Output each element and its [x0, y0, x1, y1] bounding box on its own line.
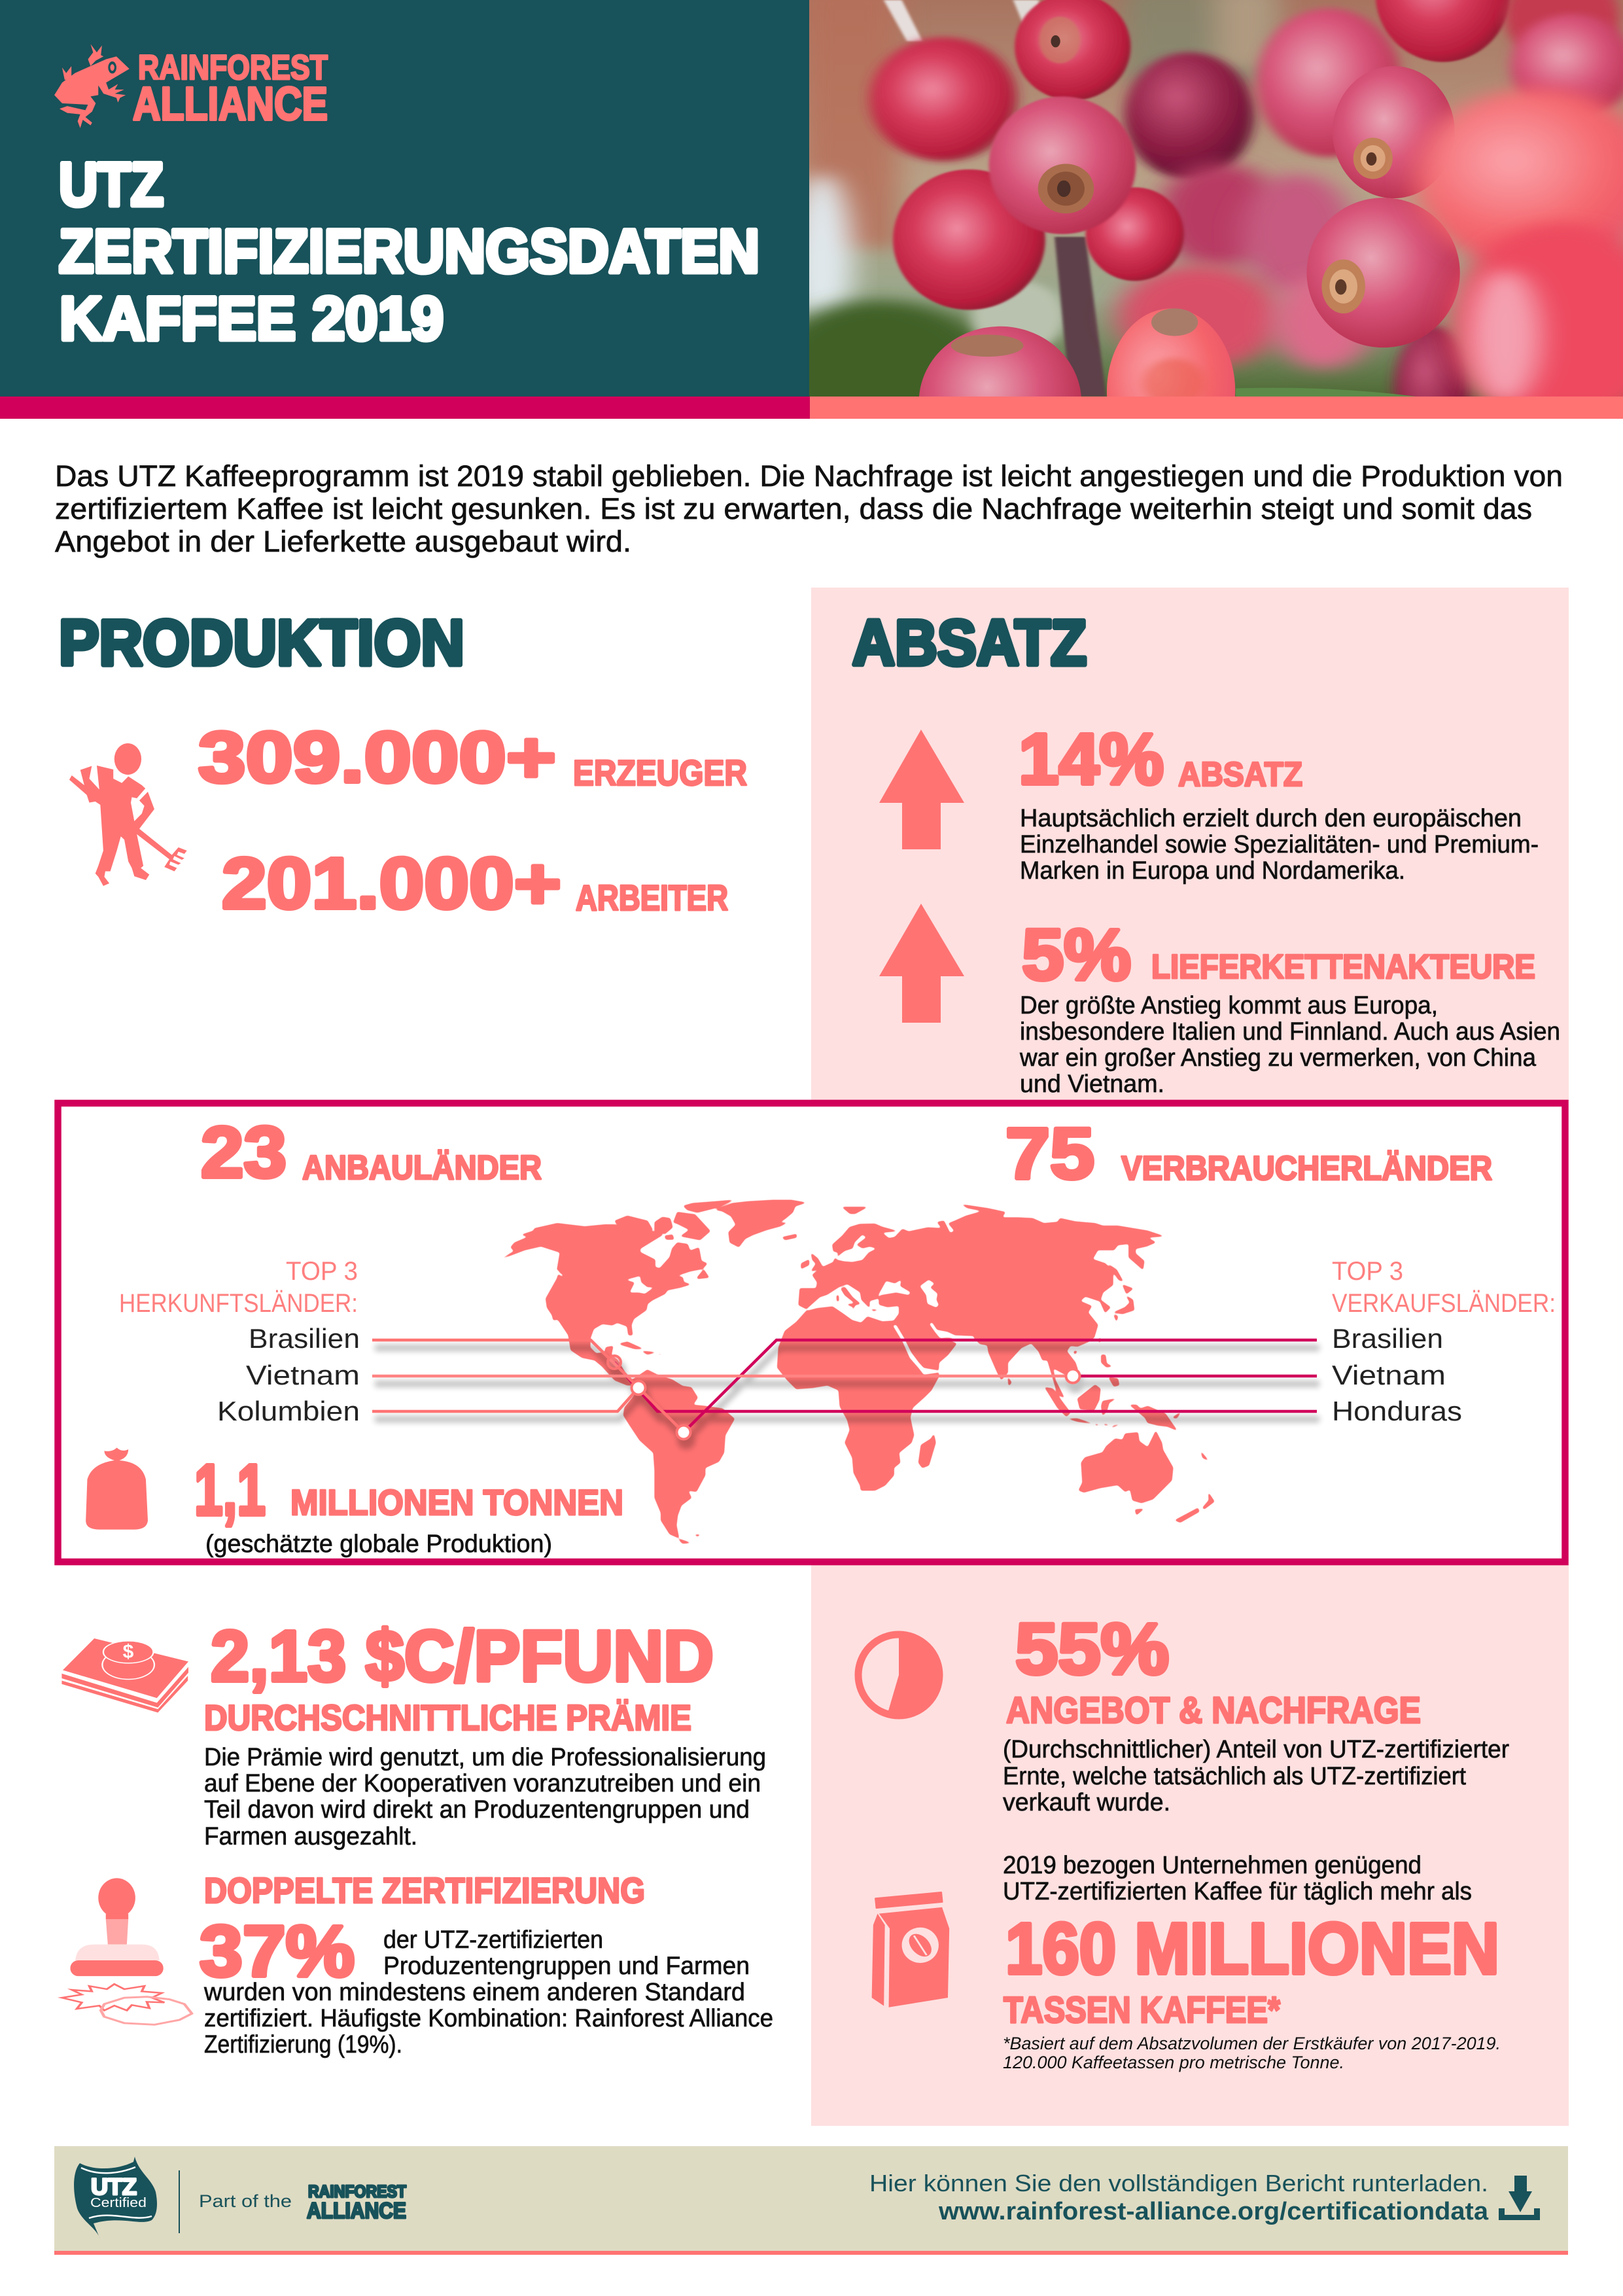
stat: 55%: 55% [1015, 1609, 1169, 1689]
icon: money stack with coin: $ [123, 1641, 134, 1663]
text: Lieferkette description: Der größte Anstieg kommt aus Europa, [1020, 992, 1438, 1019]
icon: money stack with coin [61, 1638, 188, 1712]
list: top 3 sales countries: VERKAUFSLÄNDER: [1332, 1289, 1556, 1318]
icon: stamp [61, 1878, 192, 2024]
stat: Arbeiter [222, 843, 728, 924]
logo wordmark: ALLIANCE [133, 79, 328, 130]
icon: up arrow 5% [879, 904, 964, 1023]
header accent bars [0, 397, 1623, 419]
stat: 14% Absatz [1019, 719, 1302, 800]
text: supply description [1003, 1736, 1509, 1816]
icon: farmer with rake [69, 743, 187, 886]
icon: up arrow 14% [879, 730, 964, 849]
stat: Erzeuger [198, 717, 747, 798]
text: purchases lead-in [1003, 1852, 1472, 1905]
stat: 37%: 37% [200, 1911, 355, 1992]
panel: Produktion [59, 607, 747, 924]
text: purchases lead-in: UTZ-zertifizierten Kaffee für täglich mehr als [1003, 1878, 1472, 1905]
heading: supply and demand: ANGEBOT & NACHFRAGE [1006, 1689, 1421, 1731]
stat: 5% Lieferkettenakteure: LIEFERKETTENAKTEURE [1151, 948, 1535, 986]
list: top 3 origin countries: Brasilien [249, 1323, 360, 1354]
text: download link: Hier können Sie den vollständigen Bericht runterladen. [869, 2170, 1488, 2197]
stat: 1,1 Millionen Tonnen: (geschätzte globale Produktion) [205, 1530, 552, 1558]
list: top 3 sales countries: Honduras [1332, 1396, 1462, 1426]
text: part of the Rainforest Alliance: ALLIANCE [307, 2199, 406, 2223]
text: certification description: Produzentengruppen und Farmen [383, 1952, 750, 1980]
stat: 1,1 Millionen Tonnen: 1,1 [194, 1450, 266, 1530]
text: certification description: wurden von mindestens einem anderen Standard [203, 1979, 745, 2006]
list: top 3 sales countries [1332, 1257, 1556, 1426]
stat: 75 Verbraucherländer: 75 [1005, 1114, 1094, 1194]
text: Lieferkette description: insbesondere Italien und Finnland. Auch aus Asien [1020, 1018, 1560, 1046]
logo wordmark: RAINFOREST [138, 48, 328, 87]
heading: Tassen Kaffee: TASSEN KAFFEE* [1003, 1989, 1281, 2031]
text: part of the Rainforest Alliance: RAINFOREST [308, 2181, 406, 2201]
stat: Erzeuger: 309.000+ [198, 717, 556, 798]
intro text: Angebot in der Lieferkette ausgebaut wird. [55, 525, 631, 558]
text: Absatz description: Einzelhandel sowie Spezialitäten- und Premium- [1020, 831, 1539, 858]
title: KAFFEE 2019 [60, 284, 444, 353]
list: top 3 origin countries: TOP 3 [286, 1257, 358, 1286]
list: top 3 origin countries: HERKUNFTSLÄNDER: [119, 1289, 358, 1318]
text: certification description: zertifiziert. Häufigste Kombination: Rainforest Alliance [204, 2005, 773, 2032]
section: price premium [61, 1616, 766, 1850]
logo wordmark [133, 48, 328, 130]
section: cups of coffee [872, 1852, 1501, 2072]
text: Absatz description: Hauptsächlich erzielt durch den europäischen [1020, 805, 1522, 832]
stat: Erzeuger: ERZEUGER [573, 752, 747, 793]
icon: UTZ Certified badge: Certified [90, 2196, 147, 2210]
stat: price: 2,13 $C/PFUND [211, 1616, 714, 1697]
icon: UTZ Certified badge [74, 2157, 157, 2239]
icon: sack [86, 1448, 148, 1530]
stat: 23 Anbauländer: 23 [201, 1112, 287, 1193]
heading: average premium: DURCHSCHNITTLICHE PRÄMIE [204, 1697, 691, 1738]
footnote: *Basiert auf dem Absatzvolumen der Erstkäufer von 2017-2019. [1003, 2034, 1501, 2053]
text: certification description: Zertifizierung (19%). [204, 2031, 402, 2058]
stat: 23 Anbauländer [201, 1112, 542, 1193]
text: download link [869, 2170, 1489, 2225]
list: top 3 origin countries: Vietnam [246, 1360, 360, 1390]
text: purchases lead-in: 2019 bezogen Unternehmen genügend [1003, 1852, 1422, 1879]
icon: pie chart 55% [858, 1634, 939, 1716]
text: supply description: verkauft wurde. [1003, 1789, 1170, 1816]
text: premium description: Teil davon wird direkt an Produzentengruppen und [204, 1796, 750, 1824]
text: premium description: auf Ebene der Kooperativen voranzutreiben und ein [204, 1770, 761, 1797]
text: supply description: (Durchschnittlicher) Anteil von UTZ-zertifizierter [1003, 1736, 1509, 1763]
stat: Arbeiter: ARBEITER [576, 877, 728, 918]
stat: 1,1 Millionen Tonnen: MILLIONEN TONNEN [290, 1482, 623, 1523]
footnote [1003, 2034, 1501, 2072]
stat: Arbeiter: 201.000+ [222, 843, 561, 924]
list: top 3 sales countries: Brasilien [1332, 1323, 1443, 1354]
connector lines [372, 1340, 1319, 1446]
text: premium description [204, 1744, 766, 1850]
text: download link: www.rainforest-alliance.org/certificationdata [938, 2198, 1489, 2225]
stat: 160 Millionen: 160 MILLIONEN [1005, 1909, 1499, 1989]
stat: 75 Verbraucherländer [1005, 1114, 1492, 1194]
stat: 1,1 Millionen Tonnen [194, 1450, 623, 1558]
intro text [55, 459, 1563, 558]
text: supply description: Ernte, welche tatsächlich als UTZ-zertifiziert [1003, 1763, 1466, 1790]
stat: 14% Absatz: ABSATZ [1178, 756, 1302, 794]
panel: lower pink background [811, 1565, 1569, 2126]
text: certification description: der UTZ-zertifizierten [383, 1926, 603, 1954]
stat: 5% Lieferkettenakteure: 5% [1022, 915, 1131, 995]
world map [471, 1191, 1256, 1557]
photo: red coffee cherries [809, 0, 1623, 397]
text: Absatz description [1020, 805, 1539, 885]
text: Absatz description: Marken in Europa und Nordamerika. [1020, 857, 1405, 885]
heading: Produktion: PRODUKTION [59, 607, 464, 679]
section: double certification [61, 1870, 773, 2058]
list: top 3 sales countries: TOP 3 [1332, 1257, 1403, 1286]
stat: 75 Verbraucherländer: VERBRAUCHERLÄNDER [1121, 1150, 1492, 1188]
icon: coffee bag [872, 1892, 949, 2007]
intro text: zertifiziertem Kaffee ist leicht gesunken. Es ist zu erwarten, dass die Nachfrage weiterhin steigt und somit das [55, 492, 1532, 525]
footnote: 120.000 Kaffeetassen pro metrische Tonne. [1003, 2053, 1344, 2072]
stat: 23 Anbauländer: ANBAULÄNDER [302, 1149, 542, 1187]
stat: 14% Absatz: 14% [1019, 719, 1164, 800]
title [59, 150, 759, 353]
markers [608, 1356, 1079, 1439]
heading: double certification: DOPPELTE ZERTIFIZIERUNG [204, 1870, 645, 1911]
section: supply and demand [858, 1609, 1509, 1816]
panel: Absatz [811, 588, 1569, 1101]
text: Lieferkette description [1019, 992, 1560, 1098]
footer [54, 2146, 1568, 2255]
text: premium description: Farmen ausgezahlt. [204, 1823, 417, 1850]
text: part of the Rainforest Alliance: Part of the [199, 2191, 292, 2211]
text: Lieferkette description: und Vietnam. [1020, 1070, 1164, 1098]
text: part of the Rainforest Alliance [199, 2181, 406, 2223]
text: Lieferkette description: war ein großer Anstieg zu vermerken, von China [1019, 1044, 1537, 1072]
stat: 5% Lieferkettenakteure [1022, 915, 1535, 995]
header panel: teal title block [0, 0, 810, 397]
intro text: Das UTZ Kaffeeprogramm ist 2019 stabil geblieben. Die Nachfrage ist leicht angestiegen und die Produktion von [55, 459, 1563, 493]
title: UTZ [59, 150, 164, 219]
text: certification description [203, 1926, 773, 2058]
text: premium description: Die Prämie wird genutzt, um die Professionalisierung [204, 1744, 766, 1771]
list: top 3 origin countries [119, 1257, 360, 1426]
heading: Absatz: ABSATZ [852, 607, 1087, 679]
panel: world map box [58, 1103, 1565, 1562]
list: top 3 origin countries: Kolumbien [217, 1396, 360, 1426]
title: ZERTIFIZIERUNGSDATEN [59, 217, 759, 285]
icon: Rainforest Alliance frog [54, 44, 130, 128]
list: top 3 sales countries: Vietnam [1332, 1360, 1446, 1390]
icon: UTZ Certified badge: UTZ [91, 2174, 137, 2200]
icon: download arrow [1499, 2176, 1540, 2220]
